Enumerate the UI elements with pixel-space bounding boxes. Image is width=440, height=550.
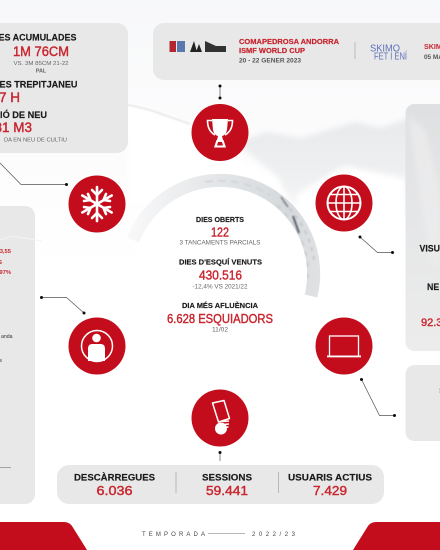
note: comparison: PAL: [36, 68, 47, 74]
note: artificial snow: DA EN NEU DE CULTIU: [4, 138, 67, 144]
sponsor logos: [170, 41, 226, 52]
stat: downloads: 6.036: [96, 484, 133, 498]
footer season label: 2022/23: [252, 532, 296, 538]
connector: phone to bar: [218, 451, 222, 461]
value: 1M 76CM: 1M 76CM: [13, 44, 69, 59]
stat: sessions: [202, 472, 252, 498]
note: comparison: [14, 61, 68, 74]
connector: trophy to panel: [218, 84, 222, 100]
label: new: NE: [427, 282, 439, 292]
stat: open days: DIES OBERTS: [196, 215, 244, 224]
icon: phone in hand: [192, 390, 248, 446]
stat: active users: USUARIS ACTIUS: [288, 472, 372, 482]
event: Comapedrosa: [239, 38, 339, 64]
panel: world cup events: [153, 23, 440, 80]
stat: downloads: DESCÀRREGUES: [74, 472, 155, 482]
footer shape right: [353, 522, 440, 550]
red figures: 3,55: [0, 249, 12, 255]
stat: downloads: [74, 472, 155, 498]
logo: Skimo Fet i Ení: FET I ENÍ: [374, 50, 407, 62]
stat: ski days sold: -12,4% VS 2021/22: [192, 284, 248, 290]
connector: globe to panel: [358, 236, 394, 254]
central ring with season stats: [133, 180, 314, 362]
event: Comapedrosa: COMAPEDROSA ANDORRA: [239, 38, 339, 46]
event: Comapedrosa: ISMF WORLD CUP: [239, 47, 305, 55]
connector: snowflake to panel: [0, 163, 68, 186]
panel: right lower stats: [406, 365, 440, 441]
dark notes: anda: [1, 334, 13, 340]
stat: sessions: 59.441: [206, 484, 248, 498]
stat: busiest day: 11/02: [212, 328, 229, 334]
stat: busiest day: [167, 301, 273, 334]
heading: accumulated snow: ES ACUMULADES: [0, 32, 76, 42]
heading: trampled hours: ES TREPITJANEU: [0, 80, 78, 90]
icon: snowflake: [68, 176, 126, 232]
footer season label: [142, 532, 296, 538]
stat: active users: [288, 472, 372, 498]
stat: ski days sold: 430.516: [199, 268, 242, 282]
connector: laptop to panel: [360, 378, 396, 417]
panel: snow stats: [0, 23, 128, 153]
icon: person: [68, 318, 126, 374]
icon: trophy: [192, 104, 248, 161]
logo: Skimo Fet i Ení: [370, 44, 407, 62]
panel: right web stats: [406, 104, 440, 351]
connector: person to panel: [40, 296, 86, 314]
logo: Skimo Fet i Ení: SKIMO: [370, 44, 400, 54]
stat: open days: 3 TANCAMENTS PARCIALS: [180, 240, 260, 246]
red figures: [0, 249, 12, 276]
footer season label: TEMPORADA: [142, 532, 205, 538]
stat: busiest day: DIA MÉS AFLUÈNCIA: [182, 301, 259, 310]
icon: laptop: [316, 318, 372, 374]
panel: left social stats: [0, 206, 42, 504]
stat: ski days sold: [179, 258, 262, 290]
stat: active users: 7.429: [313, 484, 347, 498]
dark notes: [0, 334, 13, 364]
footer shape left: [0, 522, 87, 550]
stat: ski days sold: DIES D'ESQUÍ VENUTS: [179, 258, 262, 266]
note: comparison: VS. 3M 85CM 21-22: [14, 61, 68, 67]
event: Skimo: [424, 43, 440, 61]
icon: globe: [316, 174, 372, 232]
panel: app stats bar: [57, 465, 384, 504]
stat: busiest day: 6.628 ESQUIADORS: [167, 312, 273, 326]
stat: sessions: SESSIONS: [202, 472, 252, 482]
heading: snow production: IÓ DE NEU: [0, 109, 47, 120]
stat: open days: 122: [211, 226, 229, 240]
stat: open days: [180, 215, 260, 246]
event: Comapedrosa: 20 - 22 GENER 2023: [239, 58, 301, 64]
